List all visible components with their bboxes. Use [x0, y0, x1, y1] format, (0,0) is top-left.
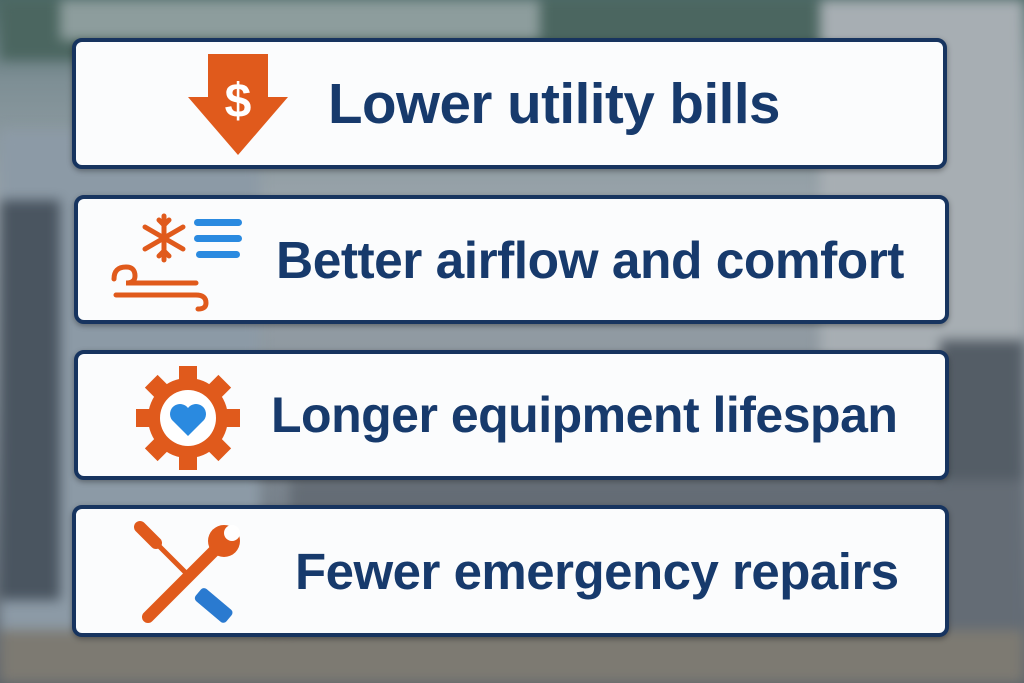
- icon: wrench screwdriver: [134, 521, 240, 623]
- icon: dollar down arrow: [188, 54, 288, 155]
- icon: snowflake airflow: [112, 214, 242, 312]
- heading text: Better airflow and comfort: [276, 230, 904, 288]
- heading text: Longer equipment lifespan: [271, 387, 897, 443]
- icon: gear heart: [136, 366, 240, 470]
- icon: dollar down arrow: $: [225, 75, 252, 128]
- panel: lower utility bills: [72, 38, 947, 169]
- panel: fewer repairs: [72, 505, 949, 637]
- panel: longer lifespan: [74, 350, 949, 480]
- heading text: Lower utility bills: [328, 72, 780, 135]
- heading text: Fewer emergency repairs: [295, 542, 899, 600]
- panel: better airflow: [74, 195, 949, 324]
